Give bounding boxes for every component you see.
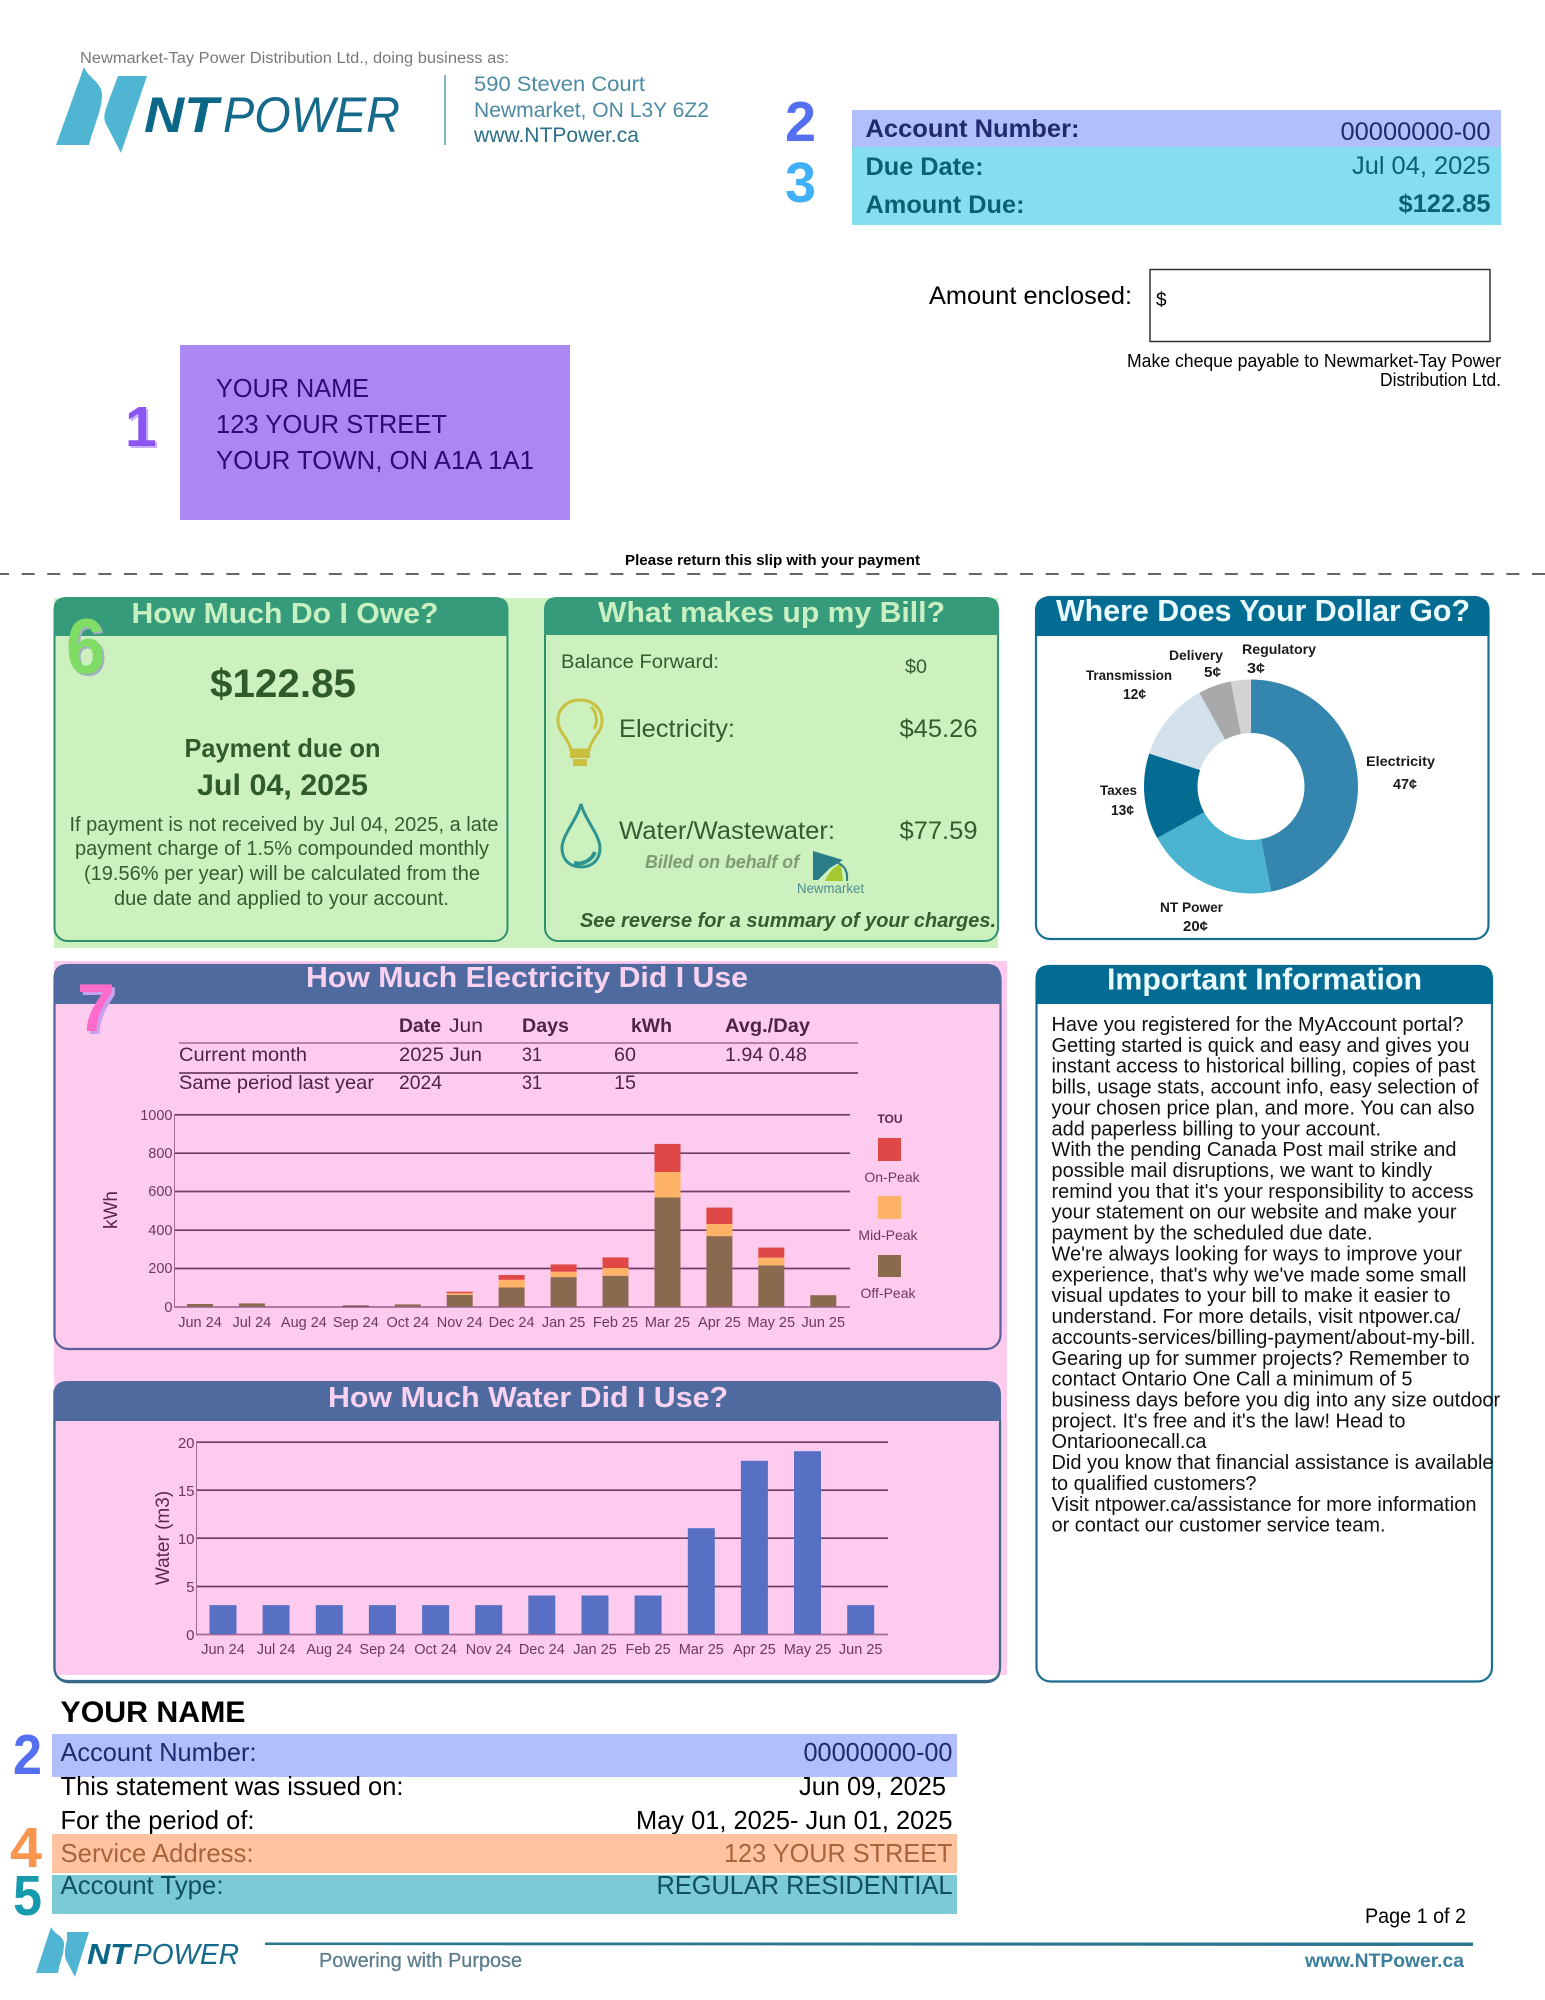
- bar chart: water use: Sep 24: [359, 1642, 405, 1658]
- panel: how much do I owe: [54, 597, 508, 941]
- bar chart: electricity use: Feb 25: [593, 1315, 638, 1331]
- donut labels: Electricity: [1366, 753, 1435, 769]
- statement details table: Account Type:: [60, 1870, 224, 1900]
- chart legend: TOU: Off-Peak: [860, 1285, 916, 1301]
- icon: Newmarket logo: [797, 851, 864, 896]
- logo wordmark: [144, 87, 400, 143]
- icon: Newmarket logo: Newmarket: [797, 881, 864, 896]
- bar chart: water use: Nov 24: [466, 1642, 512, 1658]
- water row: Water/Wastewater:: [619, 817, 835, 845]
- balance forward row: $0: [905, 657, 927, 678]
- usage table: 31: [522, 1044, 542, 1066]
- callout number 6: 6: [68, 604, 107, 692]
- callout number 1: 1: [125, 395, 157, 459]
- donut labels: 20¢: [1183, 918, 1208, 935]
- mailing address box: [180, 345, 570, 520]
- bar chart: water use: Water (m3): [153, 1491, 174, 1585]
- account summary box: Amount Due:: [866, 191, 1024, 219]
- account summary box: Account Number:: [866, 115, 1080, 143]
- bar chart: water use: 5: [186, 1579, 194, 1596]
- usage table: kWh: [631, 1015, 672, 1037]
- bar chart: electricity use: Jan 25: [542, 1315, 585, 1331]
- footer wordmark: [87, 1939, 239, 1971]
- heading: How Much Do I Owe?: [132, 598, 438, 630]
- donut chart: [1144, 680, 1358, 893]
- usage table: Avg./Day: [725, 1015, 810, 1037]
- usage table: 2024: [399, 1072, 442, 1094]
- information text: or contact our customer service team.: [1052, 1515, 1386, 1537]
- return slip note: Please return this slip with your payment: [625, 552, 920, 569]
- amount enclosed field: $: [1156, 290, 1167, 311]
- late payment text: payment charge of 1.5% compounded monthly: [75, 838, 489, 860]
- callout number 3: 3: [785, 151, 816, 215]
- donut labels: Delivery: [1169, 647, 1223, 663]
- information text: contact Ontario One Call a minimum of 5: [1052, 1369, 1412, 1391]
- page number: Page 1 of 2: [1365, 1905, 1466, 1928]
- usage table: 60: [614, 1044, 636, 1066]
- information text: instant access to historical billing, copies of past: [1052, 1056, 1476, 1078]
- amount enclosed field: [929, 270, 1490, 342]
- bar chart: water use: Jan 25: [573, 1642, 617, 1658]
- callout number 5: 5: [13, 1864, 42, 1928]
- donut labels: [1086, 641, 1435, 935]
- chart legend: TOU: Mid-Peak: [858, 1227, 919, 1243]
- logo wordmark: POWER: [223, 87, 400, 143]
- callout number 6: 6: [66, 602, 105, 690]
- icon: NT Power logo mark: [56, 67, 147, 153]
- electricity row: [619, 715, 978, 743]
- usage table: 31: [522, 1072, 542, 1094]
- account summary box: [852, 110, 1501, 225]
- bar chart: electricity use: Jul 24: [233, 1315, 271, 1331]
- payment due date: Jul 04, 2025: [197, 769, 368, 802]
- cheque note: [1127, 351, 1501, 390]
- electricity row: $45.26: [900, 715, 978, 743]
- bar chart: electricity use: [101, 1108, 850, 1331]
- balance forward row: [561, 652, 927, 678]
- donut labels: Taxes: [1100, 782, 1137, 798]
- donut labels: Regulatory: [1242, 641, 1316, 657]
- information text: bills, usage stats, account info, easy selection of: [1052, 1077, 1479, 1099]
- heading: How Much Water Did I Use?: [328, 1382, 728, 1414]
- donut labels: NT Power: [1160, 899, 1224, 915]
- customer name: YOUR NAME: [60, 1696, 246, 1729]
- mailing address box: 123 YOUR STREET: [216, 409, 447, 439]
- bar chart: water use: Aug 24: [306, 1642, 352, 1658]
- information text: experience, that's why we've made some small: [1052, 1264, 1466, 1286]
- panel: how much electricity did I use: [54, 962, 1001, 1349]
- panel: important information: [1036, 962, 1501, 1682]
- pink section background: [54, 961, 1007, 1675]
- donut labels: 12¢: [1123, 686, 1146, 703]
- green section background: [54, 598, 998, 948]
- information text: to qualified customers?: [1052, 1473, 1256, 1495]
- information text: business days before you dig into any size outdoor: [1052, 1390, 1501, 1412]
- balance forward row: Balance Forward:: [561, 652, 719, 673]
- statement details table: Jun 09, 2025: [799, 1771, 946, 1801]
- bar chart: electricity use: Dec 24: [489, 1315, 535, 1331]
- footer: [36, 1927, 1473, 1977]
- address: www.NTPower.ca: [473, 124, 639, 147]
- information text: add paperless billing to your account.: [1052, 1118, 1381, 1140]
- usage table: Jun: [449, 1015, 483, 1037]
- information text: your statement on our website and make your: [1052, 1202, 1457, 1224]
- information text: Ontarioonecall.ca: [1052, 1431, 1207, 1453]
- cheque note: Distribution Ltd.: [1380, 370, 1501, 390]
- bar chart: water use: Dec 24: [519, 1642, 565, 1658]
- donut labels: 13¢: [1111, 802, 1134, 819]
- panel: how much water did I use: [54, 1381, 1001, 1681]
- heading: Where Does Your Dollar Go?: [1056, 593, 1470, 628]
- bar chart: water use: Mar 25: [679, 1642, 724, 1658]
- address: [473, 73, 709, 147]
- bar chart: water use: [153, 1435, 888, 1658]
- information text: Getting started is quick and easy and gives you: [1052, 1035, 1470, 1057]
- statement details table: 00000000-00: [804, 1737, 952, 1767]
- usage table: 2025 Jun: [399, 1044, 482, 1066]
- donut labels: Transmission: [1086, 667, 1172, 683]
- water row: $77.59: [900, 817, 978, 845]
- bar chart: water use: Apr 25: [733, 1642, 776, 1658]
- information text: Visit ntpower.ca/assistance for more information: [1052, 1494, 1476, 1516]
- heading: What makes up my Bill?: [598, 597, 945, 629]
- statement details table: Account Number:: [60, 1737, 256, 1767]
- see reverse note: See reverse for a summary of your charges.: [580, 910, 996, 932]
- address: 590 Steven Court: [474, 73, 645, 96]
- footer wordmark: POWER: [133, 1939, 239, 1971]
- chart legend: TOU: TOU: [877, 1112, 903, 1126]
- mailing address box: YOUR NAME: [216, 373, 369, 403]
- logo wordmark: NT: [144, 87, 223, 143]
- bar chart: water use: Jun 24: [201, 1642, 245, 1658]
- bar chart: electricity use: 800: [148, 1146, 172, 1162]
- callout number 7: 7: [80, 973, 118, 1049]
- usage table: Same period last year: [179, 1072, 375, 1094]
- bar chart: water use: 20: [178, 1435, 194, 1452]
- usage table: Current month: [179, 1044, 307, 1066]
- billed on behalf note: Billed on behalf of: [645, 852, 801, 872]
- usage table: 1.94 0.48: [725, 1044, 807, 1066]
- information text: Have you registered for the MyAccount portal?: [1052, 1014, 1464, 1036]
- statement details table: For the period of:: [60, 1805, 254, 1835]
- icon: water drop: [562, 804, 600, 867]
- bar chart: electricity use: Aug 24: [281, 1315, 327, 1331]
- amount due: $122.85: [210, 662, 356, 706]
- information text: Gearing up for summer projects? Remember to: [1052, 1348, 1470, 1370]
- usage table: Days: [522, 1015, 569, 1037]
- electricity row: Electricity:: [619, 715, 735, 743]
- panel: what makes up my bill: [544, 597, 999, 941]
- statement details table: Service Address:: [60, 1838, 254, 1868]
- amount enclosed field: Amount enclosed:: [929, 282, 1132, 310]
- bar chart: electricity use: 200: [148, 1261, 172, 1277]
- information text: understand. For more details, visit ntpower.ca/: [1052, 1306, 1461, 1328]
- account summary box: Due Date:: [866, 153, 984, 181]
- information text: Did you know that financial assistance is available: [1052, 1452, 1494, 1474]
- statement details table: REGULAR RESIDENTIAL: [656, 1870, 952, 1900]
- mailing address box: YOUR TOWN, ON A1A 1A1: [216, 445, 534, 475]
- late payment text: [70, 814, 498, 910]
- bar chart: electricity use: Jun 25: [802, 1315, 845, 1331]
- callout number 7: 7: [77, 970, 115, 1046]
- callout number 4: 4: [10, 1816, 42, 1880]
- icon: light bulb: [558, 700, 602, 766]
- bar chart: electricity use: 400: [148, 1223, 172, 1239]
- information text: We're always looking for ways to improve your: [1052, 1244, 1462, 1266]
- information text: remind you that it's your responsibility to access: [1052, 1181, 1474, 1203]
- bar chart: electricity use: 1000: [140, 1108, 172, 1124]
- bar chart: electricity use: Sep 24: [333, 1315, 379, 1331]
- callout number 2 lower: 2: [13, 1723, 42, 1787]
- chart legend: TOU: [858, 1112, 921, 1301]
- bar chart: water use: 0: [186, 1627, 194, 1644]
- donut labels: 3¢: [1247, 660, 1265, 677]
- usage table: 15: [614, 1072, 636, 1094]
- doing business as line: Newmarket-Tay Power Distribution Ltd., doing business as:: [80, 50, 509, 67]
- bar chart: electricity use: Oct 24: [386, 1315, 429, 1331]
- bar chart: water use: Feb 25: [626, 1642, 671, 1658]
- bar chart: electricity use: 0: [164, 1300, 172, 1316]
- information text: payment by the scheduled due date.: [1052, 1223, 1372, 1245]
- address: Newmarket, ON L3Y 6Z2: [474, 99, 709, 122]
- statement details table: May 01, 2025- Jun 01, 2025: [636, 1805, 952, 1835]
- late payment text: (19.56% per year) will be calculated from the: [84, 863, 480, 885]
- bar chart: water use: May 25: [784, 1642, 831, 1658]
- footer website: www.NTPower.ca: [1304, 1951, 1464, 1972]
- usage table: [179, 1015, 858, 1094]
- heading: How Much Electricity Did I Use: [306, 962, 748, 994]
- bar chart: water use: Oct 24: [414, 1642, 457, 1658]
- information text: visual updates to your bill to make it easier to: [1052, 1285, 1450, 1307]
- statement details table: This statement was issued on:: [60, 1771, 404, 1801]
- bar chart: water use: Jun 25: [839, 1642, 882, 1658]
- information text: accounts-services/billing-payment/about-my-bill.: [1052, 1327, 1476, 1349]
- bar chart: electricity use: Nov 24: [437, 1315, 483, 1331]
- bar chart: electricity use: Apr 25: [698, 1315, 741, 1331]
- statement details table: [52, 1734, 957, 1914]
- statement details table: 123 YOUR STREET: [724, 1838, 953, 1868]
- footer wordmark: NT: [87, 1939, 133, 1971]
- bar chart: electricity use: Mar 25: [645, 1315, 690, 1331]
- information text: your chosen price plan, and more. You can also: [1052, 1097, 1474, 1119]
- heading: Important Information: [1107, 962, 1422, 996]
- information text: possible mail disruptions, we want to kindly: [1052, 1160, 1432, 1182]
- cheque note: Make cheque payable to Newmarket-Tay Power: [1127, 351, 1501, 371]
- account summary box: Jul 04, 2025: [1352, 152, 1490, 180]
- bar chart: electricity use: 600: [148, 1184, 172, 1200]
- information text: [1052, 1014, 1501, 1537]
- bar chart: electricity use: Jun 24: [178, 1315, 222, 1331]
- information text: With the pending Canada Post mail strike and: [1052, 1139, 1456, 1161]
- water row: [619, 817, 978, 845]
- water panel white base: [54, 1379, 1000, 1682]
- bar chart: water use: 10: [178, 1531, 194, 1548]
- bar chart: water use: Jul 24: [257, 1642, 295, 1658]
- bar chart: water use: 15: [178, 1483, 194, 1500]
- late payment text: If payment is not received by Jul 04, 2025, a late: [70, 814, 498, 836]
- icon: footer logo mark: [36, 1927, 89, 1977]
- company header logo and address: [56, 50, 709, 153]
- account summary box: $122.85: [1398, 190, 1491, 218]
- tagline: Powering with Purpose: [319, 1950, 522, 1972]
- bar chart: electricity use: kWh: [101, 1191, 122, 1229]
- panel: where does your dollar go: [1035, 593, 1490, 939]
- bar chart: electricity use: May 25: [748, 1315, 795, 1331]
- account summary box: 00000000-00: [1340, 118, 1490, 146]
- late payment text: due date and applied to your account.: [114, 888, 449, 910]
- callout number 2: 2: [785, 90, 816, 154]
- chart legend: TOU: On-Peak: [864, 1169, 921, 1185]
- donut labels: 47¢: [1393, 776, 1417, 793]
- usage table: Date: [399, 1015, 441, 1037]
- donut labels: 5¢: [1204, 664, 1221, 681]
- information text: project. It's free and it's the law! Head to: [1052, 1410, 1406, 1432]
- payment due date: [184, 733, 380, 802]
- payment due date: Payment due on: [184, 733, 380, 763]
- callout number 1: 1: [127, 397, 159, 461]
